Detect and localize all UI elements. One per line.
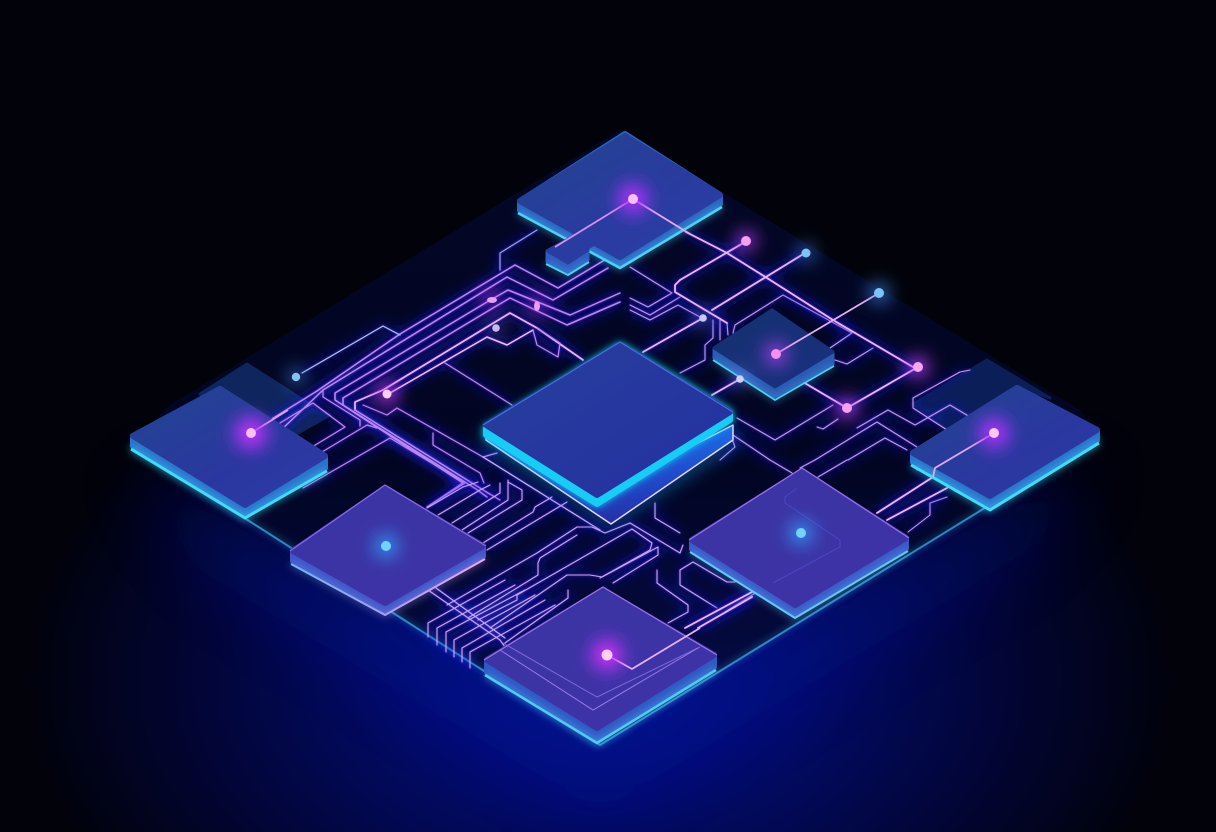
lower layer [486, 425, 733, 524]
lower right inner trace [773, 488, 840, 583]
translucent back tile left [200, 364, 330, 442]
node: blue right [874, 288, 884, 298]
circuit traces: right side [630, 267, 970, 612]
node: lower right magenta [842, 403, 852, 413]
node: trace bundle [382, 390, 392, 398]
connector from top tile to right node [686, 232, 913, 367]
left tile lit line [251, 410, 288, 433]
node: top tile [628, 194, 638, 204]
glow beneath board [130, 460, 1100, 800]
cyan lit band [486, 345, 730, 504]
node: blue upper [802, 248, 810, 258]
connector pair lower right [685, 592, 752, 628]
lower left lit edge [291, 559, 485, 615]
node: magenta upper [741, 236, 751, 246]
line to top node [555, 199, 633, 247]
circuit nodes [246, 194, 999, 660]
connector from blue node [712, 253, 805, 310]
node: spark right [534, 301, 540, 311]
bottom tile face [487, 590, 714, 728]
node: left tile [246, 428, 256, 438]
connector to pale node [643, 318, 703, 352]
tile: lower left [290, 485, 486, 615]
connector block on top tile [546, 199, 633, 275]
glow under processor [483, 425, 735, 526]
right tile lit trace [933, 433, 994, 477]
board front edge [130, 437, 1100, 745]
right tile face [913, 388, 1097, 496]
lower right top edge [689, 468, 909, 540]
lit connectors on the board [643, 232, 947, 628]
small block lit line [776, 293, 879, 354]
central processor [483, 342, 735, 526]
tile: small right block [713, 293, 879, 400]
node: small block [771, 349, 781, 359]
connector lower right nodes [803, 367, 918, 408]
bottom tile lit trace [607, 628, 700, 669]
lower right face [692, 471, 906, 605]
node: lower left tile [381, 541, 391, 551]
node: pale bundle [492, 324, 500, 332]
node: lower right tile [796, 528, 806, 538]
tile: bottom [484, 587, 717, 743]
node: pale lower [736, 375, 744, 383]
lower right lit edge [690, 551, 908, 618]
node: left blue [292, 373, 300, 381]
lower left top edge [290, 485, 486, 551]
bottom tile inner trace two [500, 648, 698, 710]
bottom tile inner trace one [503, 643, 700, 697]
top tile connector right [633, 199, 690, 234]
node halos [235, 184, 1009, 670]
connector near core [712, 379, 740, 395]
left tile face [133, 389, 325, 505]
small block face [714, 310, 833, 387]
circuit board base [130, 130, 1100, 745]
tile: left [131, 389, 327, 518]
circuit traces: lower centre [427, 480, 735, 668]
connector to right tile second [887, 488, 947, 520]
circuit traces: left bundle [262, 230, 620, 530]
top tile lit edge [518, 207, 722, 268]
node: pale upper [699, 314, 707, 322]
connector to right tile [877, 477, 933, 513]
processor top edge [483, 342, 733, 425]
lower left face [293, 488, 483, 603]
node: spark left [487, 297, 497, 303]
connector from magenta node [675, 242, 745, 323]
connector pair lower right second [698, 597, 752, 628]
right tile lit edge [911, 443, 1099, 510]
node: right tile [989, 428, 999, 438]
bottom tile top edge [484, 587, 717, 660]
connector block lit edge [546, 262, 589, 275]
top tile face [520, 136, 720, 257]
tile: lower right [689, 468, 909, 618]
node: right magenta [913, 362, 923, 372]
small block lit edge [713, 360, 834, 400]
translucent back tile right [913, 360, 1050, 430]
left tile lit edge [131, 449, 327, 518]
node: bottom tile [602, 650, 612, 660]
connector block face [547, 219, 614, 263]
tile: right [911, 388, 1099, 510]
bottom tile lit edge [485, 670, 716, 743]
tile: top [518, 134, 722, 268]
processor face [486, 345, 730, 495]
